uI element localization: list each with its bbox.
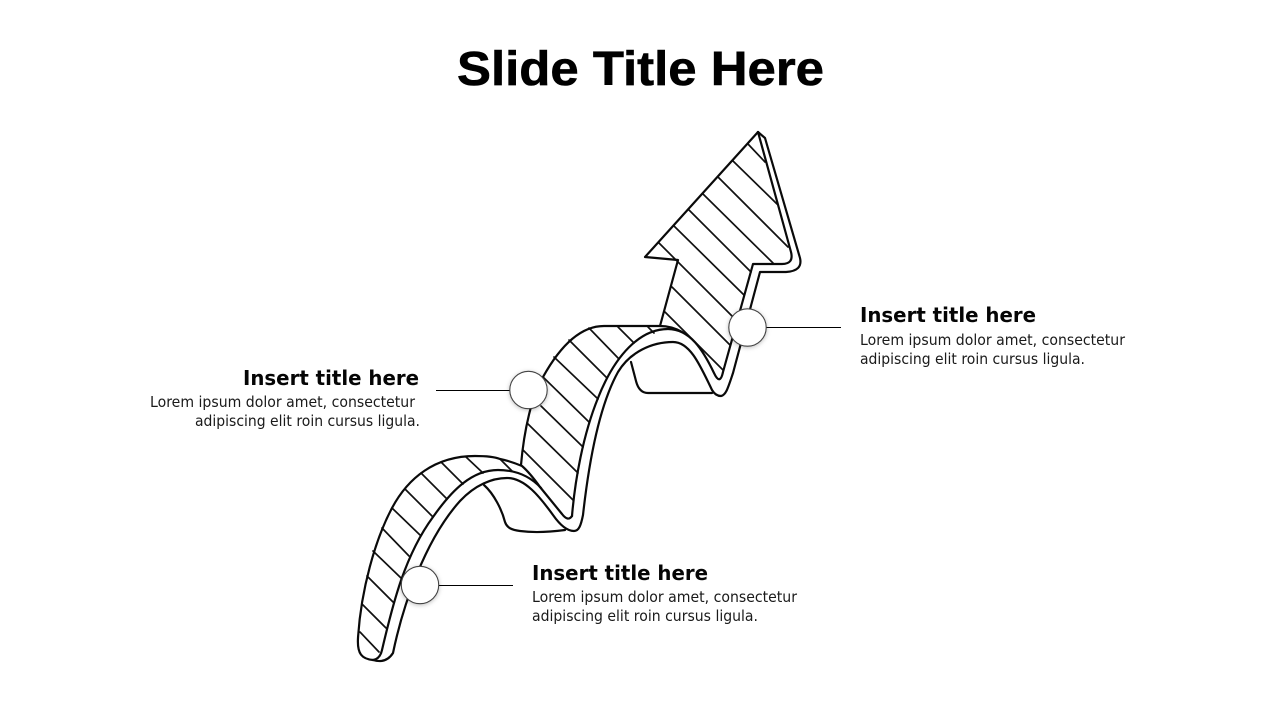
title: Slide Title Here: [457, 43, 824, 96]
icon: rising ribbon arrow: [358, 132, 800, 661]
text block: middle left: adipiscing elit roin cursus ligula.: [195, 412, 420, 430]
heading: bottom: Insert title here: [532, 561, 708, 585]
text block: bottom: [532, 588, 798, 625]
text block: top right: Lorem ipsum dolor amet, consectetur: [860, 331, 1126, 349]
text block: top right: [860, 331, 1126, 368]
heading: middle left: Insert title here: [243, 366, 419, 390]
text block: top right: adipiscing elit roin cursus ligula.: [860, 350, 1085, 368]
callout: bottom: [401, 561, 798, 625]
text block: bottom: Lorem ipsum dolor amet, consectetur: [532, 588, 798, 606]
middle ribbon hatching: [523, 327, 654, 500]
callout: middle left: [150, 366, 547, 430]
text block: middle left: Lorem ipsum dolor amet, consectetur: [150, 393, 416, 411]
heading: top right: Insert title here: [860, 303, 1036, 327]
lower ribbon hatching: [360, 457, 512, 652]
arrow head hatching: [659, 144, 788, 370]
callout: top right: [729, 303, 1126, 368]
marker: middle left: [510, 371, 547, 409]
marker: top right: [729, 309, 766, 346]
ribbon outlines: [358, 132, 800, 661]
text block: middle left: [150, 393, 420, 430]
marker: bottom: [401, 566, 439, 604]
text block: bottom: adipiscing elit roin cursus ligula.: [532, 607, 758, 625]
ribbon underside shapes: [484, 362, 712, 532]
